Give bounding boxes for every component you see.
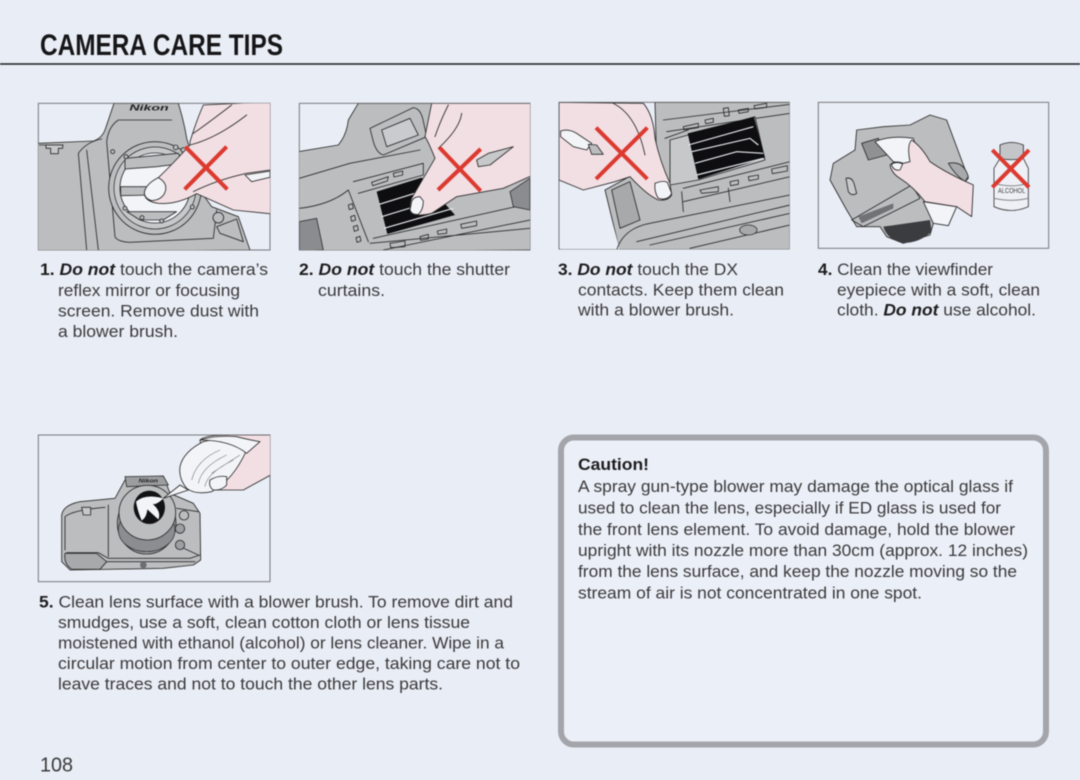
- caption 1: [40, 261, 268, 341]
- caution text: used to clean the lens, especially if ED glass is used for: [578, 500, 1002, 518]
- caption 5: 5. Clean lens surface with a blower brush. To remove dirt and: [39, 594, 513, 612]
- caption 4: cloth. Do not use alcohol.: [837, 302, 1036, 320]
- caption 2: [299, 261, 511, 300]
- caption 3: contacts. Keep them clean: [578, 282, 784, 300]
- caption 5: moistened with ethanol (alcohol) or lens cleaner. Wipe in a: [58, 634, 505, 652]
- caption 2: 2. Do not touch the shutter: [299, 261, 511, 279]
- caption 4: eyepiece with a soft, clean: [837, 282, 1040, 300]
- panel 1: reflex mirror illustration: [37, 102, 273, 252]
- panel 3: DX contacts illustration: [559, 102, 792, 252]
- red cross 2: [438, 147, 481, 191]
- caution text: [578, 478, 1028, 602]
- panel 2: shutter curtains illustration: [298, 103, 533, 252]
- alcohol bottle: ALCOHOL: [998, 186, 1025, 195]
- page number: 108: [40, 754, 73, 776]
- caption 4: [818, 261, 1040, 320]
- red cross 4: [992, 150, 1029, 187]
- caution text: upright with its nozzle more than 30cm (approx. 12 inches): [578, 542, 1028, 560]
- panel 5: blower brush illustration: [38, 435, 271, 582]
- caption 4: 4. Clean the viewfinder: [818, 261, 994, 279]
- panel 1: reflex mirror illustration: Nikon: [129, 103, 169, 113]
- caption 3: with a blower brush.: [577, 302, 734, 320]
- header rule: [0, 63, 1080, 65]
- caption 5: circular motion from center to outer edge, taking care not to: [58, 655, 520, 673]
- title: CAMERA CARE TIPS: [40, 29, 283, 62]
- caption 5: [39, 594, 520, 694]
- caption 3: [558, 261, 784, 320]
- camera being wiped: [830, 115, 973, 243]
- caution text: from the lens surface, and keep the nozzle moving so the: [578, 563, 1017, 581]
- alcohol bottle: [994, 142, 1028, 210]
- caption 1: 1. Do not touch the camera’s: [40, 261, 268, 279]
- caution heading: Caution!: [578, 456, 649, 474]
- caption 1: a blower brush.: [58, 323, 178, 341]
- panel 4: viewfinder and alcohol illustration: [818, 102, 1049, 248]
- caution text: stream of air is not concentrated in one spot.: [578, 584, 922, 602]
- red cross 3: [596, 128, 647, 179]
- caution box: [561, 438, 1046, 744]
- caption 5: leave traces and not to touch the other lens parts.: [58, 676, 443, 694]
- caption 2: curtains.: [318, 282, 385, 300]
- caution text: the front lens element. To avoid damage, hold the blower: [578, 521, 1016, 539]
- caution text: A spray gun-type blower may damage the optical glass if: [578, 478, 1013, 496]
- caption 3: 3. Do not touch the DX: [558, 261, 738, 279]
- caption 1: reflex mirror or focusing: [58, 282, 240, 300]
- caption 1: screen. Remove dust with: [58, 302, 259, 320]
- red cross 1: [185, 147, 227, 189]
- panel 5: blower brush illustration: Nikon: [139, 478, 159, 484]
- caption 5: smudges, use a soft, clean cotton cloth or lens tissue: [58, 614, 470, 632]
